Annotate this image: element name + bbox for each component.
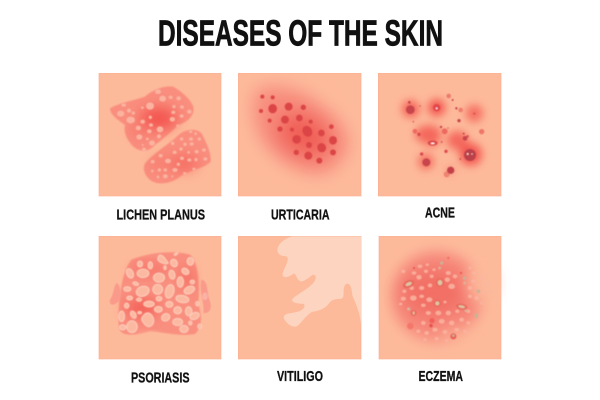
psoriasis scales bbox=[119, 252, 202, 333]
label: acne: ACNE bbox=[425, 205, 455, 222]
title: DISEASES OF THE SKIN bbox=[158, 12, 443, 54]
panel: acne bbox=[378, 73, 501, 196]
panel: lichen planus bbox=[99, 73, 221, 196]
psoriasis side patches bbox=[110, 280, 211, 313]
eczema lesions bbox=[402, 257, 480, 339]
vitiligo depigmented patch bbox=[277, 236, 361, 327]
panel: urticaria bbox=[238, 73, 361, 196]
eczema redness bbox=[392, 251, 497, 343]
label: lichen planus: LICHEN PLANUS bbox=[116, 207, 205, 224]
label: urticaria: URTICARIA bbox=[271, 207, 330, 224]
lichen planus papules bbox=[117, 89, 207, 178]
acne redness bbox=[402, 99, 483, 175]
lichen planus lower patch bbox=[144, 130, 211, 183]
psoriasis plaque bbox=[119, 252, 201, 342]
lichen planus upper patch bbox=[110, 86, 194, 151]
urticaria wheals bbox=[259, 95, 337, 164]
eczema scales bbox=[399, 263, 487, 342]
panel: eczema bbox=[379, 236, 501, 359]
urticaria redness bbox=[253, 87, 348, 174]
label: eczema: ECZEMA bbox=[418, 368, 463, 385]
acne spots bbox=[406, 94, 484, 177]
panel: vitiligo bbox=[238, 236, 361, 359]
label: vitiligo: VITILIGO bbox=[277, 368, 323, 385]
panel: psoriasis bbox=[99, 236, 221, 359]
label: psoriasis: PSORIASIS bbox=[131, 370, 190, 387]
